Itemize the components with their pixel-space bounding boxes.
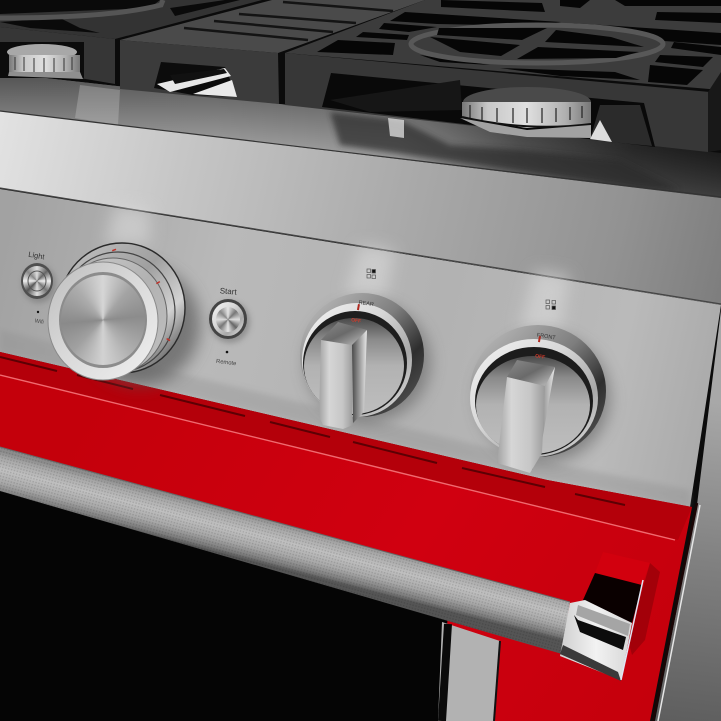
red highlight line [0,375,675,540]
wifi indicator: Wifi [34,318,44,326]
label: Start: Start [219,286,238,297]
wifi indicator [34,311,44,326]
cooktop surface [0,73,721,198]
right side panel [653,310,721,721]
backguard front face [0,111,721,305]
left grate cells [0,0,240,33]
label: Light: Light [28,250,46,262]
rear burner knob [300,293,430,429]
grate cells [317,0,721,85]
knob grip [321,322,367,345]
griddle slots [184,2,393,40]
front burner knob: OFF [535,353,546,361]
icon: front burner indicator [546,300,556,310]
right grate with burner [285,0,721,152]
back ring [59,243,185,373]
tick marks [112,249,170,341]
control panel [0,188,721,507]
start button [209,299,250,343]
scale ring [59,258,167,374]
remote indicator [216,351,237,367]
light button [21,263,56,303]
window frame [438,622,500,721]
grate opening [322,73,655,147]
door handle [0,447,570,654]
remote indicator: Remote [216,359,237,367]
knob label: FRONT [536,333,557,342]
handle mount [560,552,660,681]
brushed disc [61,275,145,365]
dark upper lip [0,352,692,540]
main dial shadow [80,265,200,385]
vent slots [0,357,625,505]
center griddle grate [120,0,425,104]
knob label: REAR [358,300,374,308]
left burner [7,44,83,79]
front burner knob [470,325,610,473]
right burner [460,87,612,142]
icon: rear burner indicator [367,269,376,278]
main rotary dial [48,243,185,380]
oven window [0,485,500,721]
rear burner knob: OFF [351,317,362,325]
light reflections [105,205,570,335]
burner grate ring [411,25,663,63]
front rim [48,262,158,380]
griddle opening [154,62,237,97]
knob grip [507,360,555,386]
red oven door [0,352,692,721]
left grate with burner [0,0,262,84]
